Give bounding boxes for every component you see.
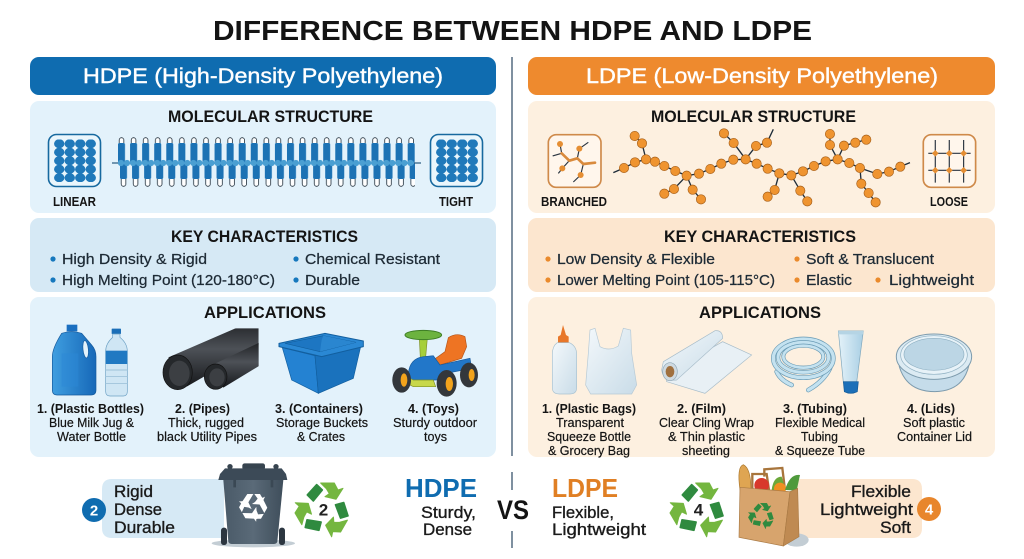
callout: HDPE traits: Durable — [114, 518, 175, 537]
heading: applications: APPLICATIONS — [699, 303, 821, 322]
list: characteristics: High Density & Rigid — [62, 251, 207, 268]
caption: pipes: 2. (Pipes) — [175, 401, 230, 416]
label: HDPE summary — [405, 473, 477, 539]
icon: film roll — [662, 331, 752, 393]
callout: LDPE traits: Flexible — [851, 482, 911, 501]
LDPE header — [528, 57, 995, 95]
caption: toys — [393, 401, 478, 444]
caption: tubing: Tubing — [801, 429, 838, 444]
caption: toys: toys — [424, 429, 447, 444]
caption: film — [659, 401, 754, 458]
caption: film: & Thin plastic — [668, 429, 745, 444]
icon: tight grid — [430, 134, 482, 186]
list: characteristics: High Melting Point (120-180°C) — [62, 272, 275, 289]
caption: plastic bottles: Blue Milk Jug & — [49, 415, 134, 430]
caption: film: 2. (Film) — [677, 401, 726, 416]
callout: LDPE traits: 4 — [925, 502, 934, 518]
label: LDPE summary: Lightweight — [552, 520, 646, 539]
list: characteristics: Elastic — [806, 272, 853, 289]
label: tight: TIGHT — [439, 195, 473, 209]
panel: LDPE key characteristics — [528, 218, 995, 292]
list: characteristics: Chemical Resistant — [305, 251, 441, 268]
HDPE header — [30, 57, 496, 95]
icon: tubing and squeeze tube — [773, 331, 863, 393]
title: DIFFERENCE BETWEEN HDPE AND LDPE — [213, 15, 812, 46]
label: LDPE summary: LDPE — [552, 473, 618, 503]
caption: pipes — [157, 401, 257, 444]
caption: plastic bottles: Water Bottle — [57, 429, 126, 444]
label: VS: VS — [497, 495, 529, 525]
caption: containers — [275, 401, 368, 444]
caption: plastic bags — [542, 401, 636, 458]
icon: recycling code 4: 4 — [694, 500, 704, 520]
list: characteristics: Lower Melting Point (105-115°C) — [557, 272, 775, 289]
caption: containers: Storage Buckets — [276, 415, 368, 430]
caption: lids: Soft plastic — [903, 415, 965, 430]
panel: LDPE molecular structure — [528, 101, 995, 213]
label: HDPE summary: Dense — [423, 520, 472, 539]
caption: plastic bags: Squeeze Bottle — [547, 429, 631, 444]
HDPE header: HDPE (High-Density Polyethylene) — [83, 65, 443, 88]
caption: pipes: black Utility Pipes — [157, 429, 257, 444]
list: characteristics: Low Density & Flexible — [557, 251, 715, 268]
caption: lids: Container Lid — [897, 429, 972, 444]
caption: tubing: & Squeeze Tube — [775, 443, 865, 458]
icon: branched box — [548, 135, 601, 187]
label: LDPE summary: Flexible, — [552, 503, 614, 522]
callout: LDPE traits: Soft — [880, 518, 911, 537]
caption: plastic bottles: 1. (Plastic Bottles) — [37, 401, 144, 416]
caption: containers: & Crates — [297, 429, 345, 444]
caption: film: sheeting — [682, 443, 730, 458]
icon: squeeze bottle and grocery bag — [552, 325, 637, 394]
chart: linear polymer chain — [112, 130, 421, 193]
heading: applications: APPLICATIONS — [204, 303, 326, 322]
label: branched: BRANCHED — [541, 195, 607, 209]
caption: pipes: Thick, rugged — [168, 415, 244, 430]
icon: jug and water bottle — [52, 325, 127, 396]
caption: tubing: Flexible Medical — [775, 415, 865, 430]
list: characteristics: Soft & Translucent — [806, 251, 935, 268]
icon: container lid — [896, 334, 972, 392]
icon: linear grid — [48, 134, 100, 186]
icon: paper grocery bag — [739, 465, 809, 547]
panel: HDPE key characteristics — [30, 218, 496, 292]
label: HDPE summary: Sturdy, — [421, 503, 476, 522]
callout: HDPE traits — [82, 479, 224, 538]
icon: black pipes — [162, 328, 259, 390]
callout: LDPE traits: Lightweight — [820, 500, 913, 519]
center divider — [511, 57, 513, 456]
chart: branched polymer chain — [613, 129, 910, 207]
caption: lids — [897, 401, 972, 444]
label: linear: LINEAR — [53, 195, 96, 209]
icon: loose grid — [923, 135, 976, 187]
icon: recycling code 2 — [291, 483, 354, 539]
icon: recycling code 4 — [666, 483, 729, 539]
icon: blue container — [279, 333, 363, 393]
caption: plastic bags: 1. (Plastic Bags) — [542, 401, 636, 416]
heading: molecular structure: MOLECULAR STRUCTURE — [651, 107, 856, 126]
heading: molecular structure: MOLECULAR STRUCTURE — [168, 107, 373, 126]
label: loose: LOOSE — [930, 195, 968, 209]
panel: LDPE applications — [528, 297, 995, 458]
panel: HDPE applications — [30, 297, 496, 457]
callout: HDPE traits: Rigid — [114, 482, 153, 501]
icon: recycling code 2: 2 — [319, 500, 328, 520]
label: HDPE summary: HDPE — [405, 473, 477, 503]
caption: plastic bags: & Grocery Bag — [548, 443, 630, 458]
heading: key characteristics: KEY CHARACTERISTICS — [664, 227, 856, 246]
callout: LDPE traits — [796, 479, 941, 538]
caption: lids: 4. (Lids) — [907, 401, 955, 416]
label: LDPE summary — [552, 473, 646, 539]
callout: HDPE traits: Dense — [114, 500, 162, 519]
caption: plastic bags: Transparent — [556, 415, 624, 430]
heading: key characteristics: KEY CHARACTERISTICS — [171, 227, 358, 246]
caption: plastic bottles — [37, 401, 144, 444]
caption: toys: Sturdy outdoor — [393, 415, 478, 430]
list: characteristics: Durable — [305, 272, 360, 289]
caption: containers: 3. (Containers) — [275, 401, 363, 416]
caption: toys: 4. (Toys) — [408, 401, 459, 416]
panel: HDPE molecular structure — [30, 101, 496, 213]
list: characteristics — [545, 251, 975, 289]
list: characteristics: Lightweight — [889, 272, 975, 289]
icon: ride-on toy — [392, 330, 478, 397]
list: characteristics — [50, 251, 441, 289]
caption: film: Clear Cling Wrap — [659, 415, 754, 430]
callout: HDPE traits: 2 — [90, 502, 98, 520]
caption: tubing — [775, 401, 865, 458]
label: VS — [497, 472, 529, 548]
icon: gray recycling bin — [212, 463, 295, 547]
LDPE header: LDPE (Low-Density Polyethylene) — [586, 65, 938, 88]
caption: tubing: 3. (Tubing) — [783, 401, 847, 416]
